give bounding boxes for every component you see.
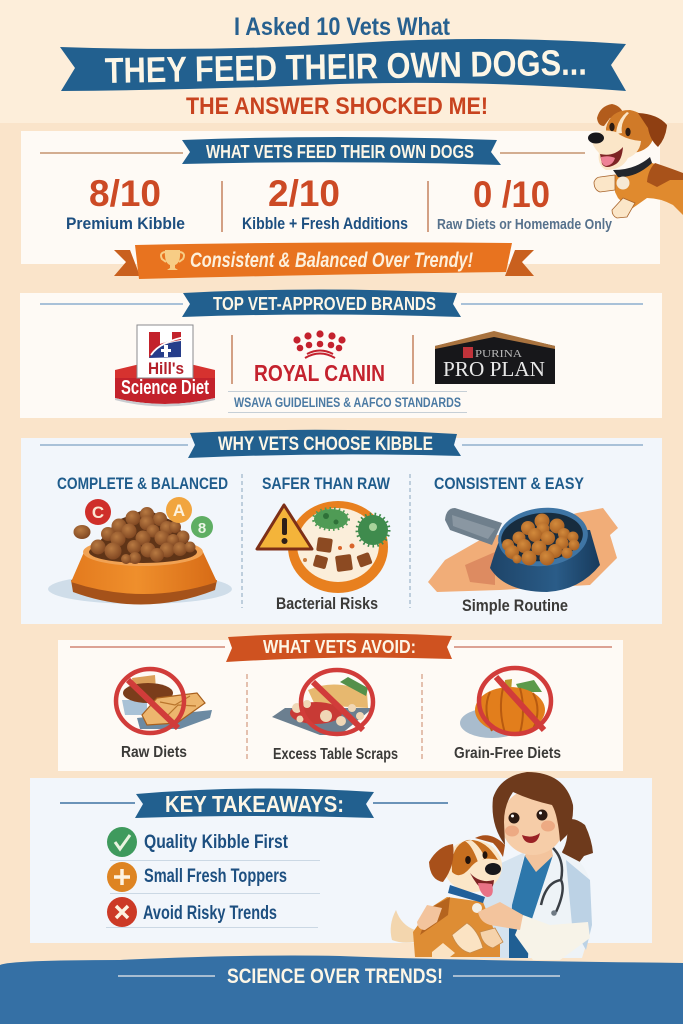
title banner [60,39,626,91]
panel: what vets feed [21,131,660,279]
tail [391,910,415,943]
stat label: raw diets: Raw Diets or Homemade Only [437,216,613,233]
kibble in pan [502,514,580,566]
body [615,162,683,215]
orange ribbon [114,250,534,276]
cheeks [505,826,519,836]
body [413,897,500,957]
icon: trophy [161,250,184,270]
column heading: complete: COMPLETE & BALANCED [57,474,228,493]
vitamin badge 8 [191,516,213,538]
dog [391,835,523,957]
stat: 2/10: 2/10 [268,173,340,214]
handle [445,508,502,545]
standards caption: WSAVA GUIDELINES & AAFCO STANDARDS [234,395,461,410]
caption: table scraps: Excess Table Scraps [273,746,398,763]
germ right [358,515,388,545]
section banner [188,430,461,458]
collar [448,885,485,903]
logo wordmark: Pro Plan: PRO PLAN [443,357,545,381]
vitamin badge A: A [173,501,185,520]
panel: why vets choose kibble [21,430,662,624]
ears and head [597,104,624,126]
takeaway: avoid trends: Avoid Risky Trends [143,903,277,924]
warning triangle [257,505,312,549]
caption: raw diets: Raw Diets [121,744,187,761]
ribbon text: Consistent & Balanced Over Trendy! [190,249,473,272]
pan body [490,530,600,592]
bowl body [71,552,217,594]
kibble mound [92,509,194,561]
stat: 8/10: 8/10 [89,173,161,214]
section heading: WHY VETS CHOOSE KIBBLE [218,434,433,455]
head [501,789,565,855]
icon: no raw diets [116,669,212,733]
section heading: WHAT VETS FEED THEIR OWN DOGS [206,142,474,162]
icon: dog peeking [588,104,683,218]
footer text: SCIENCE OVER TRENDS! [227,965,443,988]
takeaway: quality kibble [107,827,289,857]
section banner [182,290,461,317]
column heading: consistent: CONSISTENT & EASY [434,474,585,493]
vitamin badge C: C [92,503,104,522]
icon: scoop with kibble [428,503,618,592]
section heading: WHAT VETS AVOID: [263,637,416,657]
ponytail [562,819,593,864]
germ left [314,509,348,529]
coat [480,848,592,958]
section heading: TOP VET-APPROVED BRANDS [213,294,436,314]
section banner [135,788,374,818]
caption: grain-free: Grain-Free Diets [454,745,561,762]
hair [492,772,573,845]
section banner [226,633,452,662]
logo wordmark: Hill's: Hill's [148,359,184,378]
paws [432,943,455,957]
vitamin badge 8: 8 [198,520,206,537]
logo wordmark: Science Diet: Science Diet [121,377,209,399]
caption: simple routine: Simple Routine [462,596,568,615]
sleeve [515,915,590,960]
stat: 0/10: 0 /10 [473,174,550,215]
panel: top vet-approved brands [20,290,662,418]
panel: what vets avoid [58,633,623,771]
section banner [182,137,501,165]
stat label: premium kibble: Premium Kibble [66,214,185,233]
peach swoosh [428,508,618,592]
tag [616,176,630,190]
bowl base band [71,580,217,605]
bowl rim [83,538,203,566]
white blaze [616,112,629,134]
logo: Purina Pro Plan [435,331,555,384]
logo: Hill's Science Diet [115,325,215,406]
stat label: kibble + fresh: Kibble + Fresh Additions [242,214,408,233]
takeaway: quality kibble: Quality Kibble First [144,832,289,853]
collar [613,157,652,177]
paws [594,175,615,192]
logo wordmark: Purina: PURINA [475,349,522,360]
takeaway: fresh toppers: Small Fresh Toppers [144,866,287,887]
face [465,856,471,864]
muzzle [591,130,641,170]
neck [525,845,553,872]
takeaway: fresh toppers [107,862,287,892]
icon: no table scraps [272,670,373,735]
stethoscope [541,848,563,912]
title block [60,13,626,120]
vet [480,772,593,958]
section heading: KEY TAKEAWAYS: [165,791,344,817]
logo wordmark: Royal Canin: ROYAL CANIN [254,360,385,386]
vitamin badge A [166,497,192,523]
scrubs [510,855,553,958]
title: subtitle: THE ANSWER SHOCKED ME! [186,93,488,120]
eyes [508,812,520,824]
icon: no grain-free [460,668,551,738]
vitamin badge C [85,499,111,525]
ears [429,844,454,882]
panel: key takeaways [30,778,652,943]
title: main line: THEY FEED THEIR OWN DOGS... [104,42,587,91]
mouth [522,833,540,843]
icon: bacteria plate with warning [257,501,388,593]
head [444,840,502,892]
logo: Royal Canin [254,330,385,386]
icon: kibble bowl [48,497,232,605]
column heading: safer: SAFER THAN RAW [262,474,391,493]
title: first line: I Asked 10 Vets What [234,13,451,41]
vet hand front [478,902,523,930]
footer band [0,956,683,1024]
illustration: vet holding dog [391,772,593,960]
takeaway: avoid trends [107,897,277,927]
pan rim [495,503,591,571]
caption: bacterial risks: Bacterial Risks [276,594,378,613]
tag [472,903,482,913]
vet hand on dog [417,905,442,930]
